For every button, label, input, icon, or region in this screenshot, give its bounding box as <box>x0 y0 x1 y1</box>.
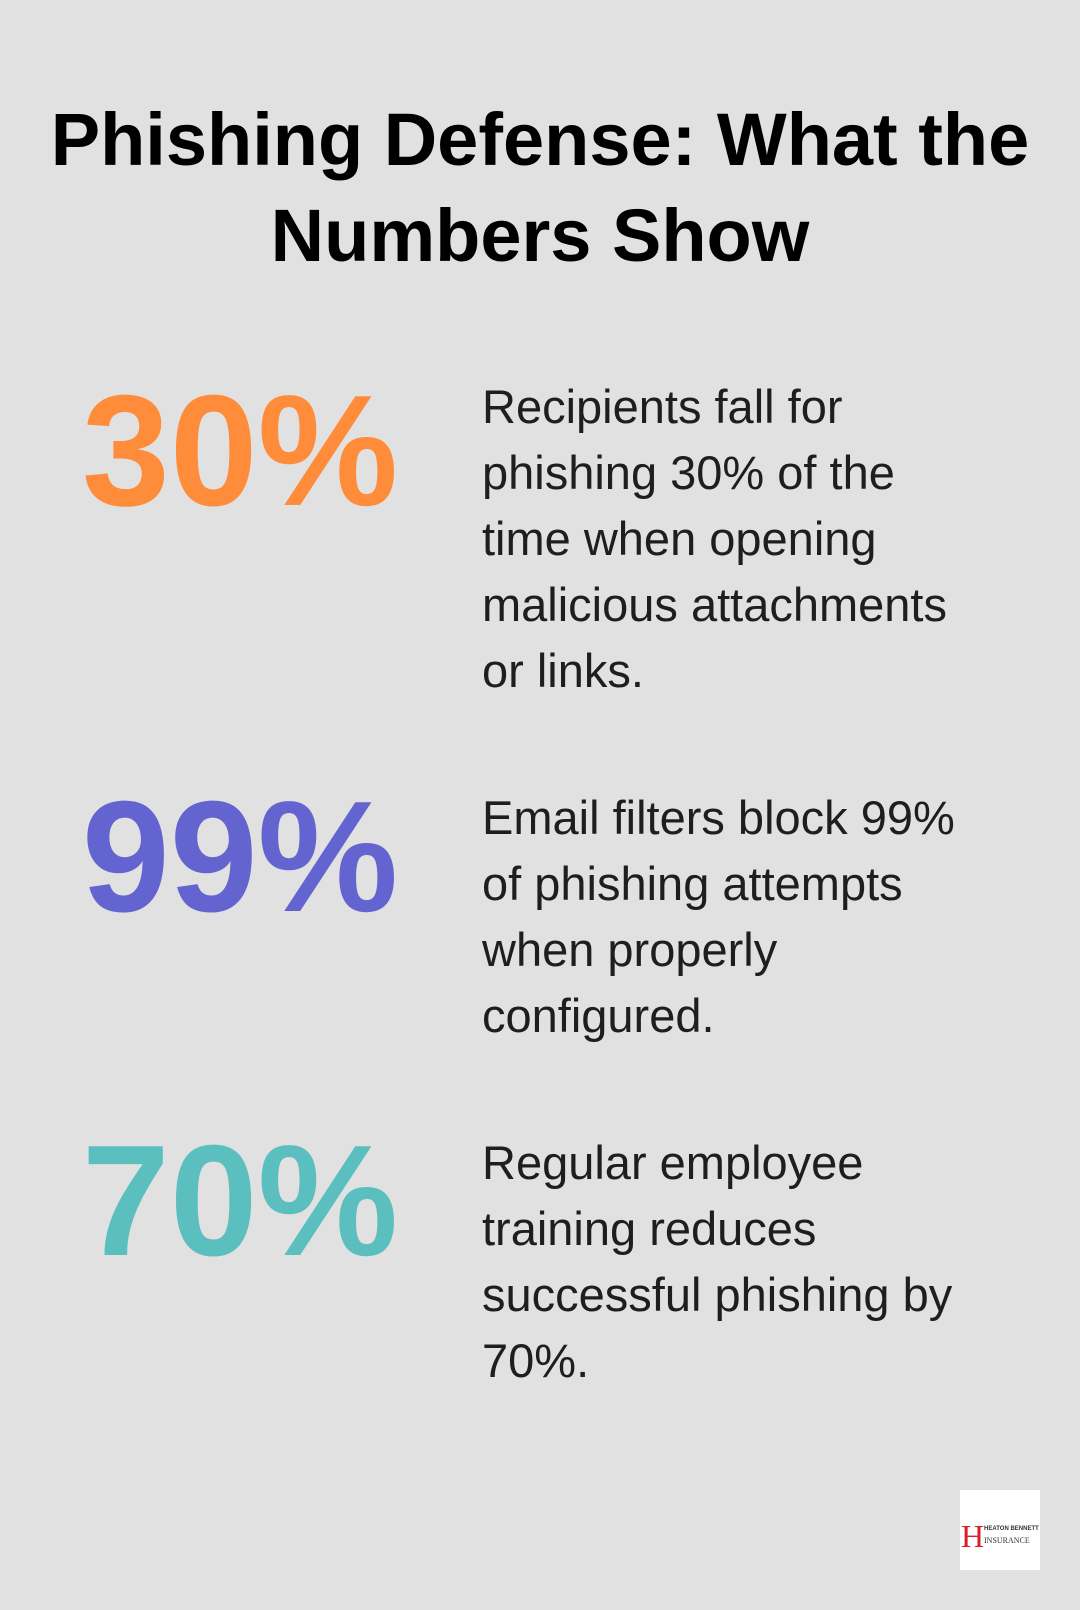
stat 3 text <box>482 1136 952 1387</box>
stat 1 text: malicious attachments <box>482 578 947 631</box>
stat 2 text <box>482 791 955 1042</box>
stat 2 text: Email filters block 99% <box>482 791 955 844</box>
stat 3 number: 70% <box>82 1113 398 1289</box>
stat 3 text: 70%. <box>482 1334 589 1387</box>
stat 3 text: Regular employee <box>482 1136 863 1189</box>
stat 2 number: 99% <box>82 769 398 945</box>
stat 1 text: or links. <box>482 644 644 697</box>
stat 2 text: of phishing attempts <box>482 857 903 910</box>
title <box>51 98 1029 277</box>
title: Phishing Defense: What the <box>51 98 1029 181</box>
stat 3 text: training reduces <box>482 1202 816 1255</box>
stat 2 text: configured. <box>482 989 715 1042</box>
logo <box>960 1490 1040 1570</box>
stat 2 text: when properly <box>482 923 777 976</box>
logo: HEATON BENNETT <box>984 1526 1039 1532</box>
stat 1 number: 30% <box>82 363 398 539</box>
logo: INSURANCE <box>984 1536 1030 1545</box>
stat 3 text: successful phishing by <box>482 1268 952 1321</box>
logo: H <box>961 1518 984 1554</box>
stat 1 text <box>482 380 947 697</box>
stat 1 text: time when opening <box>482 512 877 565</box>
stat 1 text: Recipients fall for <box>482 380 842 433</box>
stat 1 text: phishing 30% of the <box>482 446 895 499</box>
title: Numbers Show <box>271 194 809 277</box>
